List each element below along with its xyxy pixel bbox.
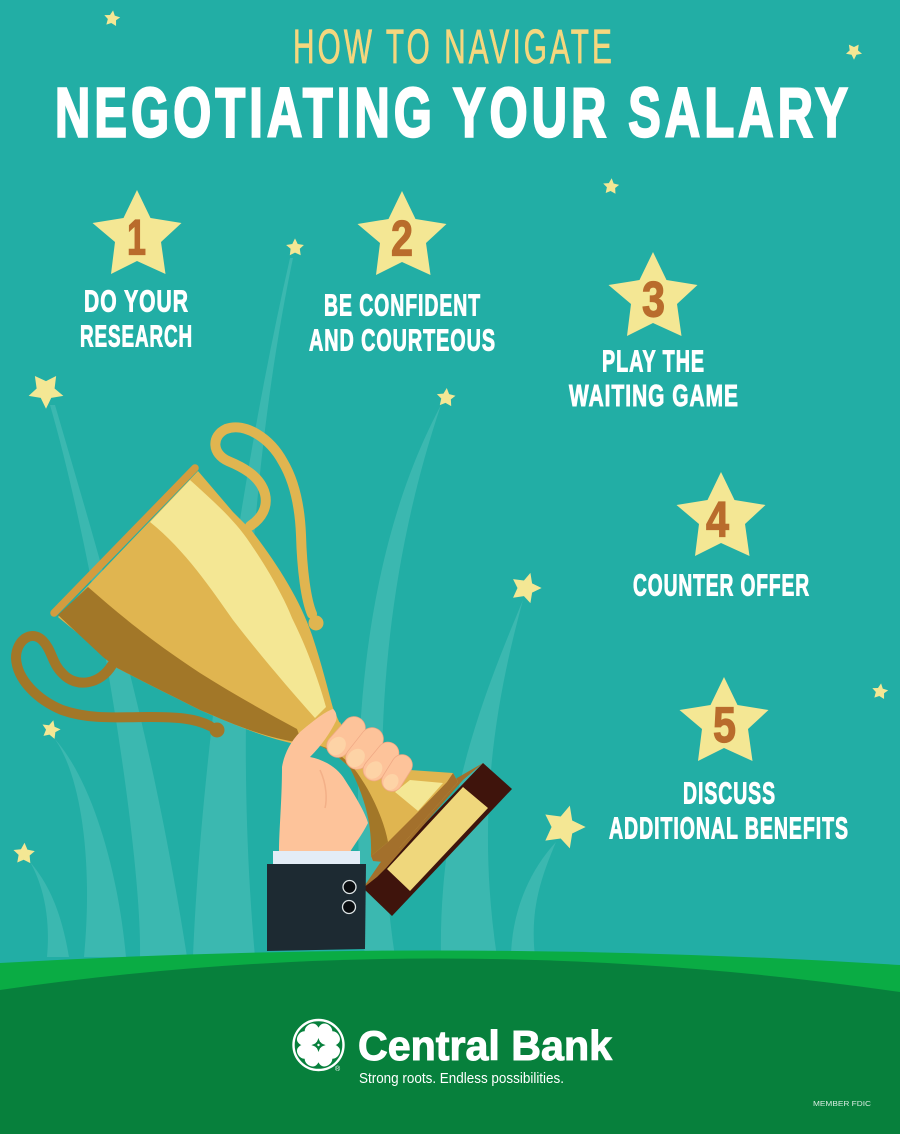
step 3 — [569, 252, 739, 413]
step 2: 2 — [391, 210, 413, 266]
central bank logo — [294, 1020, 613, 1087]
foot rim — [371, 773, 458, 862]
ground hill — [0, 950, 900, 1134]
gold nameplate — [387, 787, 488, 891]
palm and thumb — [279, 709, 368, 852]
logo ring — [294, 1020, 344, 1070]
top handle end — [308, 616, 324, 630]
step 3: WAITING GAME — [569, 378, 739, 413]
finger four — [380, 765, 402, 793]
step 5: DISCUSS — [683, 776, 776, 810]
step 4: 4 — [706, 492, 729, 548]
tagline: Strong roots. Endless possibilities. — [359, 1070, 564, 1087]
jacket sleeve — [267, 864, 366, 951]
stem shadow — [318, 745, 388, 856]
hand gripping the trophy — [279, 709, 402, 852]
cup highlight band — [150, 480, 326, 718]
stem body — [318, 722, 458, 861]
lower handle — [16, 636, 210, 726]
finger two — [343, 739, 372, 771]
step 1: RESEARCH — [80, 318, 193, 354]
step 3: PLAY THE — [602, 344, 705, 378]
step 2: AND COURTEOUS — [309, 322, 496, 358]
finger three — [362, 753, 388, 782]
lower handle end — [210, 722, 224, 738]
foot highlight — [395, 780, 443, 811]
brand name: Central Bank — [358, 1022, 613, 1069]
finger one — [324, 728, 354, 759]
cup rim — [54, 468, 195, 613]
trophy cup — [16, 427, 345, 745]
shirt cuff — [273, 851, 360, 865]
palm crease — [320, 770, 326, 808]
title — [55, 21, 852, 152]
sleeve buttons — [342, 880, 356, 914]
cup body — [58, 471, 345, 745]
cup shadow band — [58, 587, 302, 743]
step 5 — [609, 677, 849, 846]
step 5: 5 — [713, 697, 736, 753]
trophy stem and foot — [318, 722, 458, 862]
top handle — [215, 427, 312, 614]
step 1 — [80, 190, 193, 354]
step 1: DO YOUR — [84, 284, 189, 318]
heading: how to navigate: HOW TO NAVIGATE — [293, 21, 615, 74]
step 1: 1 — [127, 210, 146, 266]
clover icon — [294, 1021, 343, 1069]
registered mark: ® — [335, 1065, 341, 1073]
small decorative stars — [13, 9, 889, 863]
member fdic note: MEMBER FDIC — [813, 1099, 872, 1108]
plaque base — [363, 763, 512, 916]
step 2 — [309, 191, 496, 358]
suit sleeve — [267, 851, 366, 951]
step 3: 3 — [642, 272, 665, 328]
light beams behind the shooting stars — [30, 258, 556, 957]
step 2: BE CONFIDENT — [324, 288, 481, 322]
step 4 — [633, 472, 810, 602]
